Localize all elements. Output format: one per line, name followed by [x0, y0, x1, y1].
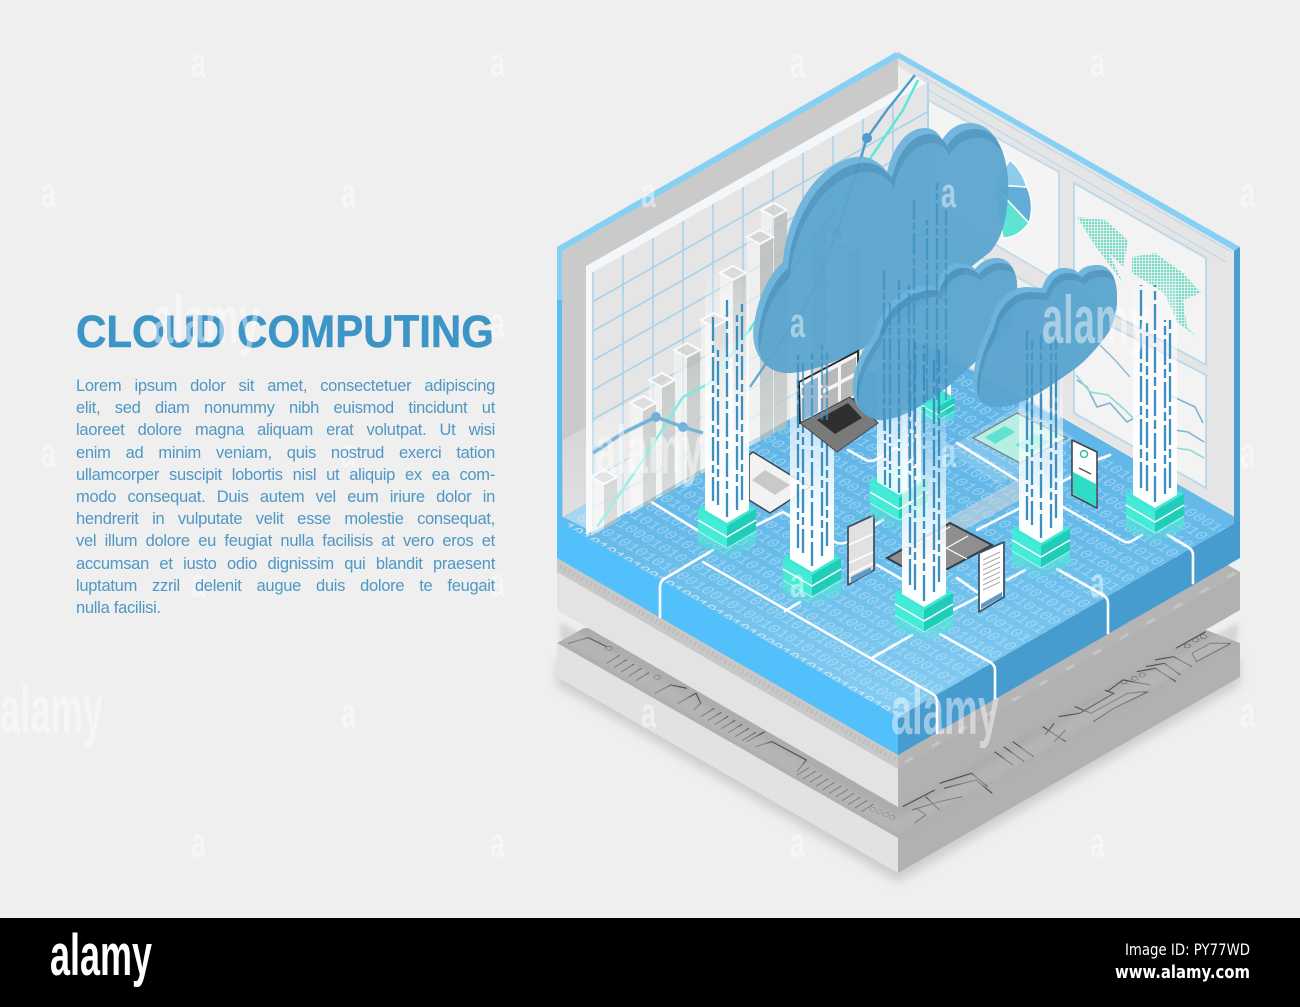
watermarks: a — [941, 429, 956, 476]
binary floor pattern: 1000101010010101001010101000101010010101001010100010 — [703, 435, 1150, 694]
top slab — [557, 323, 1240, 755]
glass lower wall tint — [563, 310, 790, 532]
white circuit lines on floor — [645, 443, 1193, 733]
binary floor pattern: 1001000101010100101010010101000101010111010100010101 — [585, 503, 1033, 762]
watermarks: a — [1240, 689, 1255, 736]
pillar: centre left — [783, 340, 841, 610]
watermarks: a — [191, 39, 206, 86]
tablet: teal — [973, 413, 1067, 463]
watermarks: a — [790, 299, 805, 346]
binary floor pattern: 0010101010100010010100101010100101010001010101001010 — [570, 512, 1018, 770]
binary floor pattern: 1010101010010100101010100010101001010101010010101001 — [556, 520, 1003, 779]
watermarks: a — [1090, 39, 1105, 86]
middle layer — [557, 375, 1240, 835]
pillar: back centre — [870, 330, 928, 533]
phone: grey — [848, 515, 874, 585]
binary floor pattern: 0101010100101000101010010101010001010100101010100101 — [717, 427, 1165, 685]
watermarks: a — [41, 429, 56, 476]
translucent glass slab — [945, 478, 1020, 540]
pillar: front centre — [895, 340, 953, 645]
binary floor pattern: 1001010010101010100010101001010010101010100101000101 — [850, 350, 1297, 609]
tablet: grey grid — [887, 523, 992, 580]
line chart: teal trend — [597, 80, 918, 527]
body text: modo consequat. Duis autem vel eum iriure dolor in — [76, 488, 495, 506]
binary floor pattern: 1010010101001010101000101010010101000101010101010010 — [614, 486, 1062, 745]
bar chart — [591, 203, 860, 536]
left wall — [557, 52, 928, 535]
watermarks: a — [790, 39, 805, 86]
binary floor pattern: 1010010100101010100101000101010100101010010101000101 — [820, 367, 1268, 626]
body text: vel illum dolore eu feugiat nulla facilisis at vero eros et — [76, 532, 495, 550]
panel: line charts — [1074, 307, 1206, 488]
binary floor pattern: 1001010101001010001010101001010100101010100010101001 — [761, 401, 1209, 660]
body text: accumsan et iusto odio dignissim qui blandit praesent — [76, 554, 495, 572]
panel: pie chart wall — [928, 100, 1059, 282]
line chart: blue trend — [593, 75, 915, 453]
watermarks: a — [341, 169, 356, 216]
tablet: left — [749, 452, 810, 513]
binary floor pattern: 0101001010001010101001010101000101001010101001010100 — [864, 342, 1300, 600]
binary floor pattern: 0010101001010100010101010010101001010100101010001010 — [659, 461, 1106, 719]
body text: elit, sed diam nonummy nibh euismod tincidunt ut — [76, 399, 495, 417]
body text: hendrerit in vulputate velit esse molestie consequat, — [76, 510, 495, 528]
bottom layer: circuit board — [557, 628, 1240, 873]
binary floor pattern: 0010101000101010100101010010101010001010101001010010 — [747, 410, 1194, 668]
watermarks: a — [641, 689, 656, 736]
cloud: large — [753, 123, 1015, 388]
binary floor pattern: 1010010101010010101001010001010101001010100010101010 — [732, 418, 1180, 677]
pillar: right — [1126, 280, 1184, 546]
data streams through clouds — [798, 183, 1056, 430]
watermarks: a — [941, 169, 956, 216]
binary floor pattern: 0100101010100010101001010101001010001010101010010101 — [806, 376, 1253, 634]
icon: pie chart — [993, 160, 1032, 238]
watermarks: alamy — [595, 412, 703, 488]
body text: ullamcorper suscipit lobortis nisl ut aliquip ex ea com- — [76, 466, 495, 484]
watermarks: a — [790, 559, 805, 606]
body text: Lorem ipsum dolor sit amet, consectetuer adipiscing — [76, 377, 495, 395]
watermarks: a — [490, 39, 505, 86]
watermarks: a — [341, 429, 356, 476]
binary floor pattern — [568, 374, 1226, 717]
body text — [76, 377, 496, 617]
watermarks: a — [1240, 169, 1255, 216]
left wall grid — [593, 82, 928, 530]
pillar: rear — [920, 383, 954, 429]
ground shadow — [557, 660, 1240, 882]
watermarks: a — [191, 819, 206, 866]
circuit traces — [568, 632, 1231, 823]
watermarks — [0, 39, 1255, 866]
watermarks: a — [490, 559, 505, 606]
footer logo: alamy — [50, 923, 152, 988]
website: www.alamy.com — [1115, 962, 1250, 983]
footer bar — [0, 918, 1300, 1007]
binary floor pattern: 0101001010100101010100010101001010100101010100101010 — [688, 444, 1136, 702]
cloud: small — [973, 265, 1117, 407]
body text: nulla facilisi. — [76, 599, 161, 617]
binary floor pattern: 0010101010010100010101001010101010001010010101010010 — [835, 359, 1283, 617]
heading: CLOUD COMPUTING — [76, 306, 494, 357]
phone: teal — [1072, 440, 1097, 508]
binary floor pattern: 0101000101010101001010010101000101011101010010101010 — [776, 393, 1224, 651]
watermarks: a — [1240, 429, 1255, 476]
binary floor pattern: 0100101010100101010010101000101010010101010001010101 — [629, 478, 1077, 736]
watermarks: a — [41, 169, 56, 216]
watermarks: a — [1090, 559, 1105, 606]
watermarks: alamy — [152, 282, 260, 358]
body text: luptatum zzril delenit augue duis dolore te feugait — [76, 577, 495, 595]
binary floor pattern: 0101010010100101000101010100010101010010101001010100 — [600, 495, 1047, 753]
pillar: centre right — [1012, 370, 1070, 581]
translucent glass sheet — [945, 405, 1075, 485]
watermarks: a — [191, 559, 206, 606]
panel: lower wall — [928, 228, 1059, 418]
watermarks: a — [341, 689, 356, 736]
image id: Image ID: PY77WD — [1125, 940, 1250, 959]
body text: laoreet dolore magna aliquam erat volutpat. Ut wisi — [76, 421, 495, 439]
watermarks: alamy — [1042, 282, 1150, 358]
watermarks: alamy — [891, 673, 999, 749]
phone: list — [979, 542, 1004, 612]
layer texture — [560, 566, 896, 760]
watermarks: a — [1090, 819, 1105, 866]
cloud: medium — [852, 258, 1023, 432]
watermarks: alamy — [0, 672, 103, 748]
panel: world map — [1074, 183, 1206, 365]
left wall white frame — [586, 72, 928, 535]
right wall — [898, 52, 1240, 520]
watermarks: a — [641, 169, 656, 216]
watermarks: a — [490, 299, 505, 346]
laptop — [799, 351, 878, 452]
body text: enim ad minim veniam, quis nostrud exerci tation — [76, 444, 495, 462]
wall edges — [557, 52, 1240, 524]
pillar: left — [698, 270, 756, 561]
binary floor pattern: 1010101001010010101010001010100101010010100101010001 — [791, 384, 1238, 643]
watermarks: a — [490, 819, 505, 866]
watermarks: a — [790, 819, 805, 866]
binary floor pattern: 1001010100010101001010101001010100010101001010100101 — [644, 469, 1091, 728]
binary floor pattern: 1010100101010010101000101010100101010010101000101001 — [673, 452, 1121, 711]
